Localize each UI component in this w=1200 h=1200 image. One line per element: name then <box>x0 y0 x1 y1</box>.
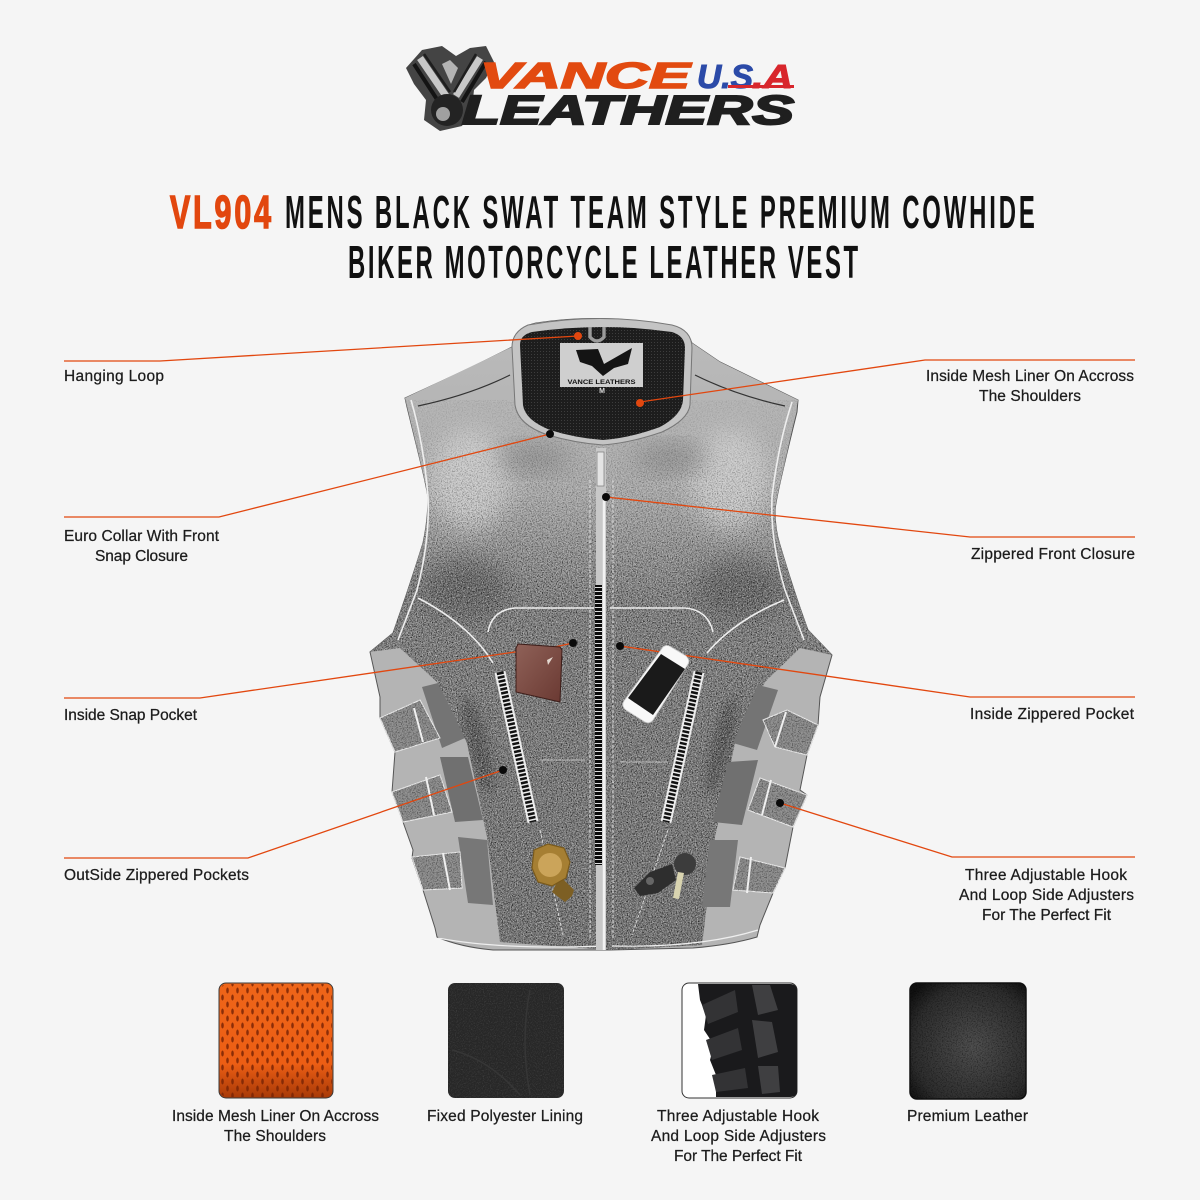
label: inside mesh liner: The Shoulders <box>979 388 1081 405</box>
icon: wrist watch <box>532 844 574 902</box>
label: inside mesh liner <box>926 368 1134 405</box>
title line 1: MENS BLACK SWAT TEAM STYLE PREMIUM COWHIDE <box>285 187 1035 238</box>
icon: wallet <box>516 644 562 702</box>
icon: smartphone <box>623 646 689 723</box>
label: side adjusters: And Loop Side Adjusters <box>959 887 1134 904</box>
right adjuster panels <box>733 685 778 750</box>
logo word: U.S.A <box>697 58 794 95</box>
swatch caption: mesh: Inside Mesh Liner On Accross <box>172 1108 379 1125</box>
strap buckles <box>414 708 786 893</box>
label: euro collar: Snap Closure <box>95 548 188 565</box>
center zipper <box>595 448 606 950</box>
vest base <box>370 318 832 950</box>
mesh liner <box>520 327 685 440</box>
swatch caption: adjusters: For The Perfect Fit <box>674 1148 803 1165</box>
left strap 2 <box>392 775 452 822</box>
label: outside zippered pockets: OutSide Zippered Pockets <box>64 867 249 884</box>
right side adjusters <box>702 685 818 907</box>
callout dots <box>499 332 784 807</box>
chest shading and leather texture <box>370 400 840 950</box>
front panels <box>370 318 832 950</box>
right strap 1 <box>763 710 818 755</box>
logo word: U.S.A: .A <box>752 58 793 95</box>
title code: VL904: VL904 <box>170 188 271 239</box>
swatch caption: adjusters <box>651 1108 826 1165</box>
logo word: VANCE: VANCE <box>480 55 692 96</box>
logo: Vance Leathers USA <box>406 46 794 133</box>
left side adjusters <box>380 683 493 905</box>
label: hanging loop: Hanging Loop <box>64 368 164 385</box>
title line 2: BIKER MOTORCYCLE LEATHER VEST <box>348 237 858 288</box>
swatch caption: mesh <box>172 1108 379 1145</box>
swatch caption: adjusters: Three Adjustable Hook <box>657 1108 819 1125</box>
shoulder stitching <box>418 375 785 406</box>
left strap 1 <box>380 700 440 752</box>
title <box>170 187 1035 288</box>
logo word: U.S.A: U.S <box>697 58 753 95</box>
vest seams <box>398 400 804 947</box>
swatch caption: adjusters: And Loop Side Adjusters <box>651 1128 826 1145</box>
swatch: side adjusters <box>682 983 797 1098</box>
size tag: M <box>599 388 605 395</box>
swatch: premium leather <box>910 983 1026 1099</box>
icon: car key <box>634 853 696 899</box>
label: inside zippered pocket: Inside Zippered Pocket <box>970 706 1135 723</box>
hanging loop <box>590 327 604 341</box>
logo word: LEATHERS: LEATHERS <box>462 87 794 133</box>
swatch caption: polyester: Fixed Polyester Lining <box>427 1108 583 1125</box>
collar <box>512 318 692 445</box>
right strap 3 <box>733 857 785 893</box>
right pocket zipper <box>666 672 699 822</box>
label text: VANCE LEATHERS <box>568 380 636 386</box>
callout lines <box>64 336 1135 858</box>
label: inside mesh liner: Inside Mesh Liner On Accross <box>926 368 1134 385</box>
label: euro collar: Euro Collar With Front <box>64 528 220 545</box>
swatch caption: leather: Premium Leather <box>907 1108 1028 1125</box>
swatch: polyester lining <box>448 983 564 1098</box>
left adjuster panels <box>422 683 465 748</box>
swatch caption: mesh: The Shoulders <box>224 1128 326 1145</box>
right strap 2 <box>748 778 807 827</box>
vest neck label <box>560 343 643 395</box>
vest illustration <box>370 318 840 950</box>
label: side adjusters <box>959 867 1134 924</box>
label: side adjusters: Three Adjustable Hook <box>965 867 1127 884</box>
label: zippered front closure: Zippered Front Closure <box>971 546 1135 563</box>
label: inside snap pocket: Inside Snap Pocket <box>64 707 198 724</box>
swatch: orange mesh <box>219 983 333 1098</box>
icon: v-twin engine <box>406 46 494 131</box>
label: euro collar <box>64 528 220 565</box>
strap texture <box>375 695 825 895</box>
left strap 3 <box>412 852 462 890</box>
label: side adjusters: For The Perfect Fit <box>982 907 1112 924</box>
left pocket zipper <box>500 672 533 822</box>
label logo mark <box>576 348 632 376</box>
